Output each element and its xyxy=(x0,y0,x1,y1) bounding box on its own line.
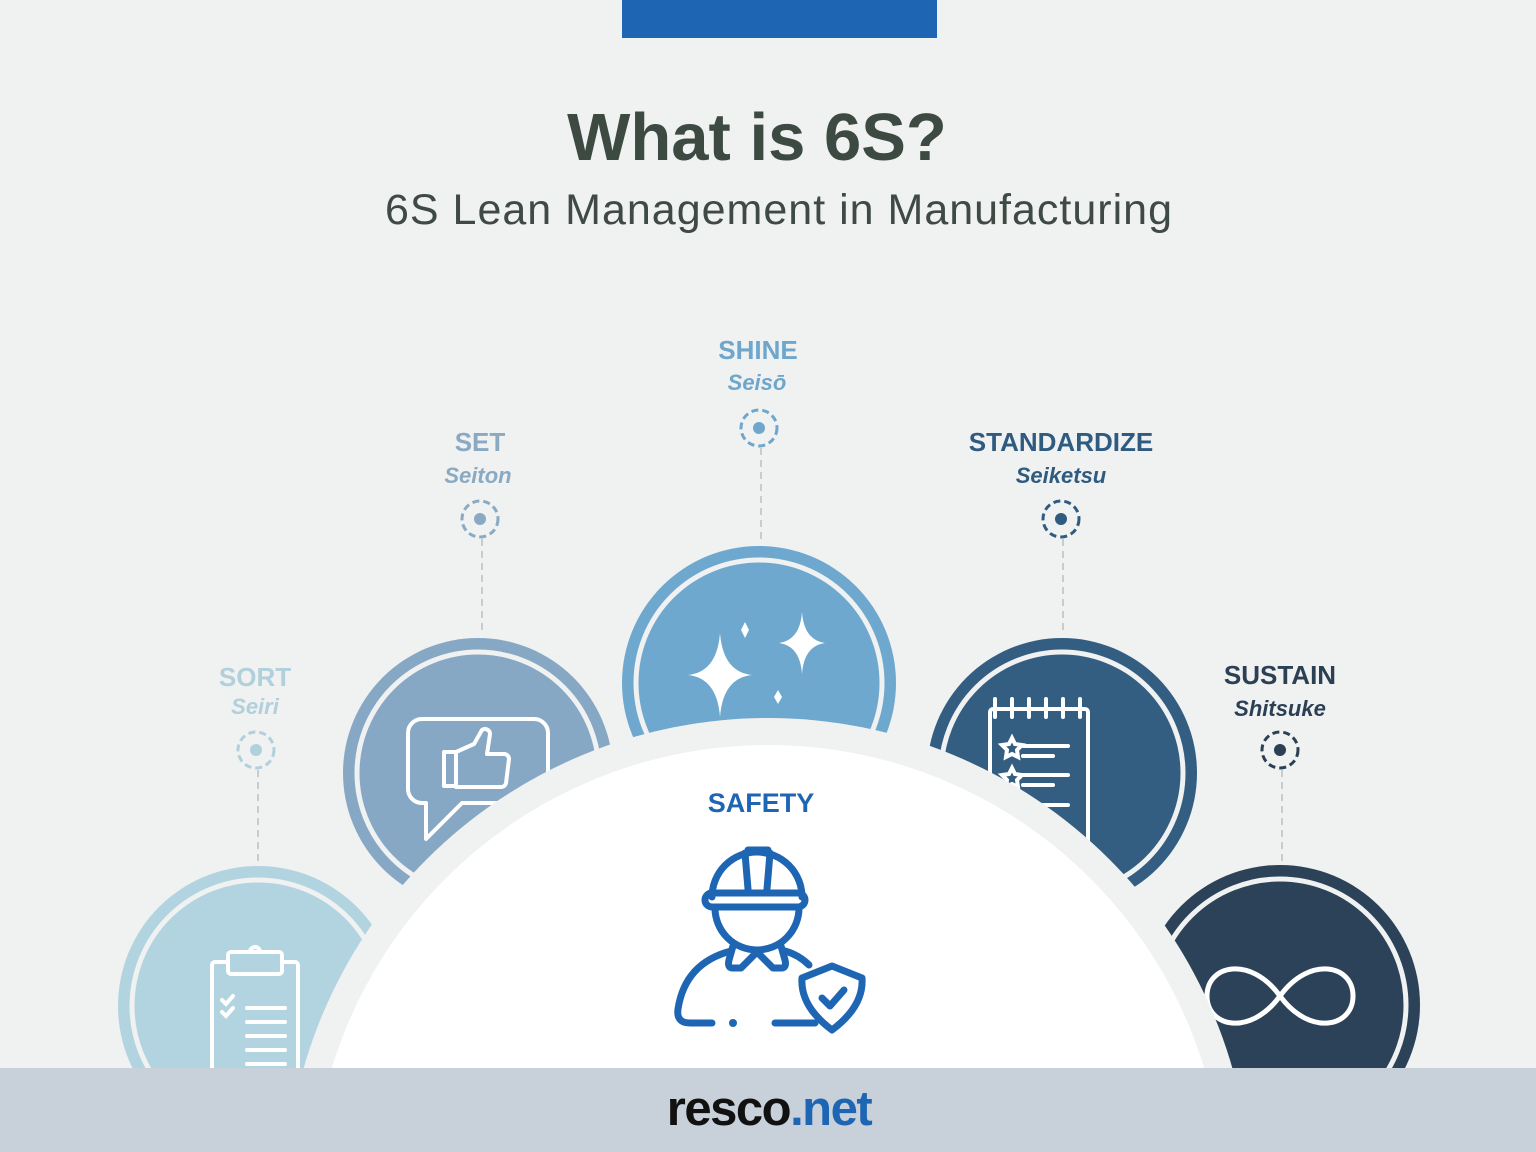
label: SET xyxy=(444,427,512,634)
label: SHINE: SHINE xyxy=(718,335,798,365)
label: STANDARDIZE: Seiketsu xyxy=(1016,463,1107,488)
footer band xyxy=(0,1068,1536,1152)
label: STANDARDIZE: STANDARDIZE xyxy=(969,427,1153,457)
icon: clipboard xyxy=(212,947,298,1092)
label: SUSTAIN xyxy=(1224,660,1336,864)
label: SORT xyxy=(219,662,291,864)
label: STANDARDIZE xyxy=(969,427,1153,634)
label: SHINE: Seisō xyxy=(728,370,786,395)
top accent bar xyxy=(622,0,937,38)
circle: STANDARDIZE xyxy=(927,638,1197,908)
circle: SORT xyxy=(118,866,398,1146)
icon: thumbs up speech bubble xyxy=(408,719,548,839)
title: What is 6S? xyxy=(567,100,947,175)
icon: worker with shield xyxy=(678,850,862,1030)
label: SUSTAIN: SUSTAIN xyxy=(1224,660,1336,690)
label: SUSTAIN: Shitsuke xyxy=(1234,696,1326,721)
label: SORT: Seiri xyxy=(231,694,280,719)
panel: SAFETY semicircle xyxy=(312,745,1224,1152)
icon: infinity xyxy=(1207,969,1353,1023)
label: SET: SET xyxy=(455,427,505,457)
label: SHINE xyxy=(718,335,798,542)
circle: SHINE xyxy=(622,546,896,820)
logo: resco.net: resco.net xyxy=(667,1082,872,1136)
label: SET: Seiton xyxy=(444,463,512,488)
circle: SET xyxy=(343,638,613,908)
circle: SUSTAIN xyxy=(1140,865,1420,1145)
halo around central semicircle xyxy=(285,718,1251,1152)
label: SORT: SORT xyxy=(219,662,291,692)
icon: sparkles xyxy=(688,612,825,717)
SAFETY heading: SAFETY xyxy=(708,788,814,818)
subtitle: 6S Lean Management in Manufacturing xyxy=(385,186,1173,234)
icon: notepad with stars xyxy=(990,699,1088,859)
